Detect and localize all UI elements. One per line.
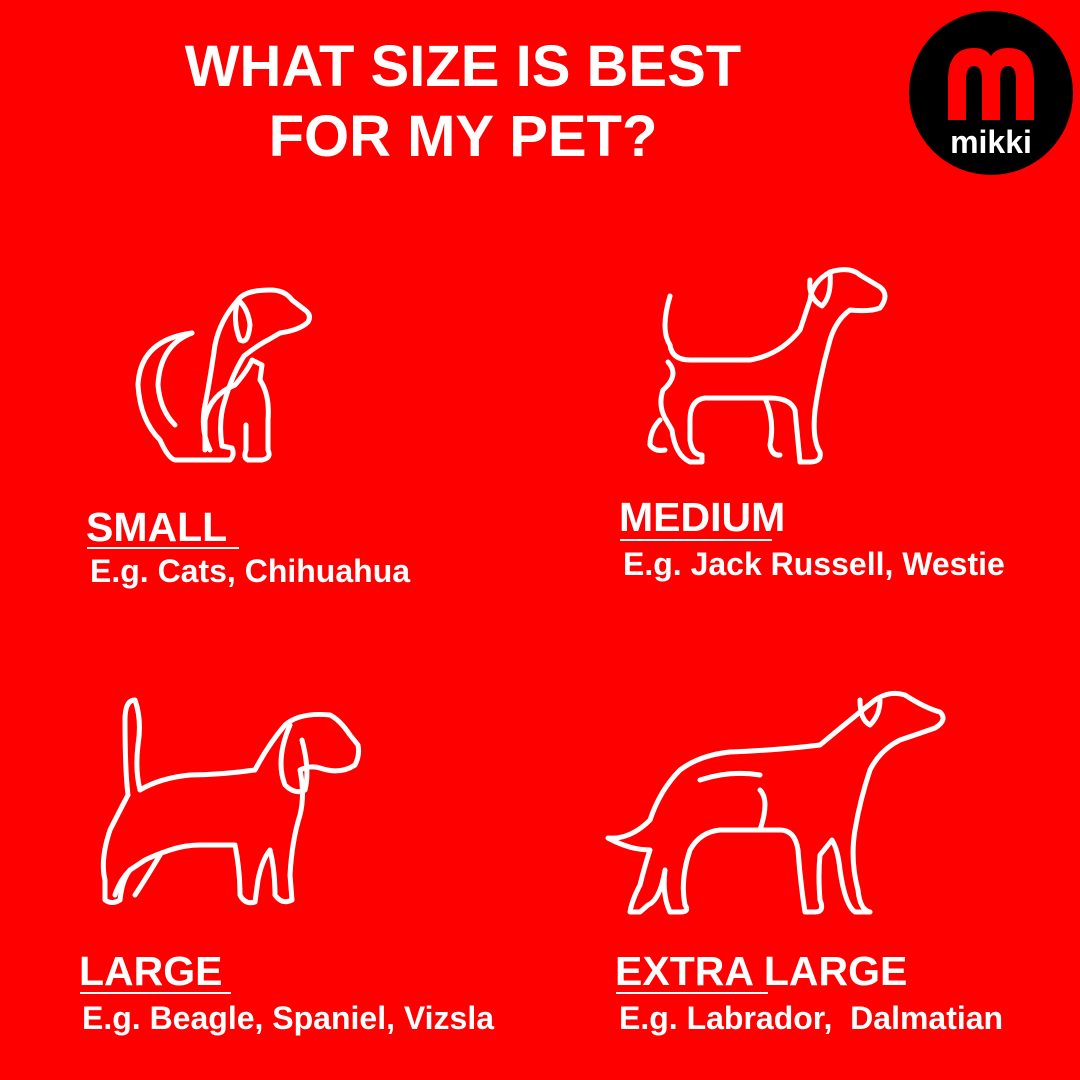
icon: small dog and cat — [138, 290, 309, 460]
icon: medium dog — [650, 270, 885, 462]
title: FOR MY PET? — [269, 104, 657, 169]
label: extra large: EXTRA LARGE — [615, 948, 907, 994]
label: large: LARGE — [79, 948, 222, 994]
text: small examples: E.g. Cats, Chihuahua — [90, 553, 410, 589]
logo: mikki — [909, 11, 1073, 175]
icon: extra large dog (labrador) — [608, 693, 943, 912]
text: large examples: E.g. Beagle, Spaniel, Vizsla — [82, 1000, 494, 1036]
text: extra large examples: E.g. Labrador, Dalmatian — [619, 1000, 1003, 1036]
title — [184, 34, 741, 169]
logo: mikki: mikki — [950, 124, 1032, 160]
text: medium examples: E.g. Jack Russell, Westie — [623, 546, 1005, 582]
icon: large dog (beagle) — [103, 700, 359, 903]
label: small: SMALL — [86, 504, 227, 550]
label: medium: MEDIUM — [619, 494, 785, 540]
title: WHAT SIZE IS BEST — [185, 34, 741, 99]
